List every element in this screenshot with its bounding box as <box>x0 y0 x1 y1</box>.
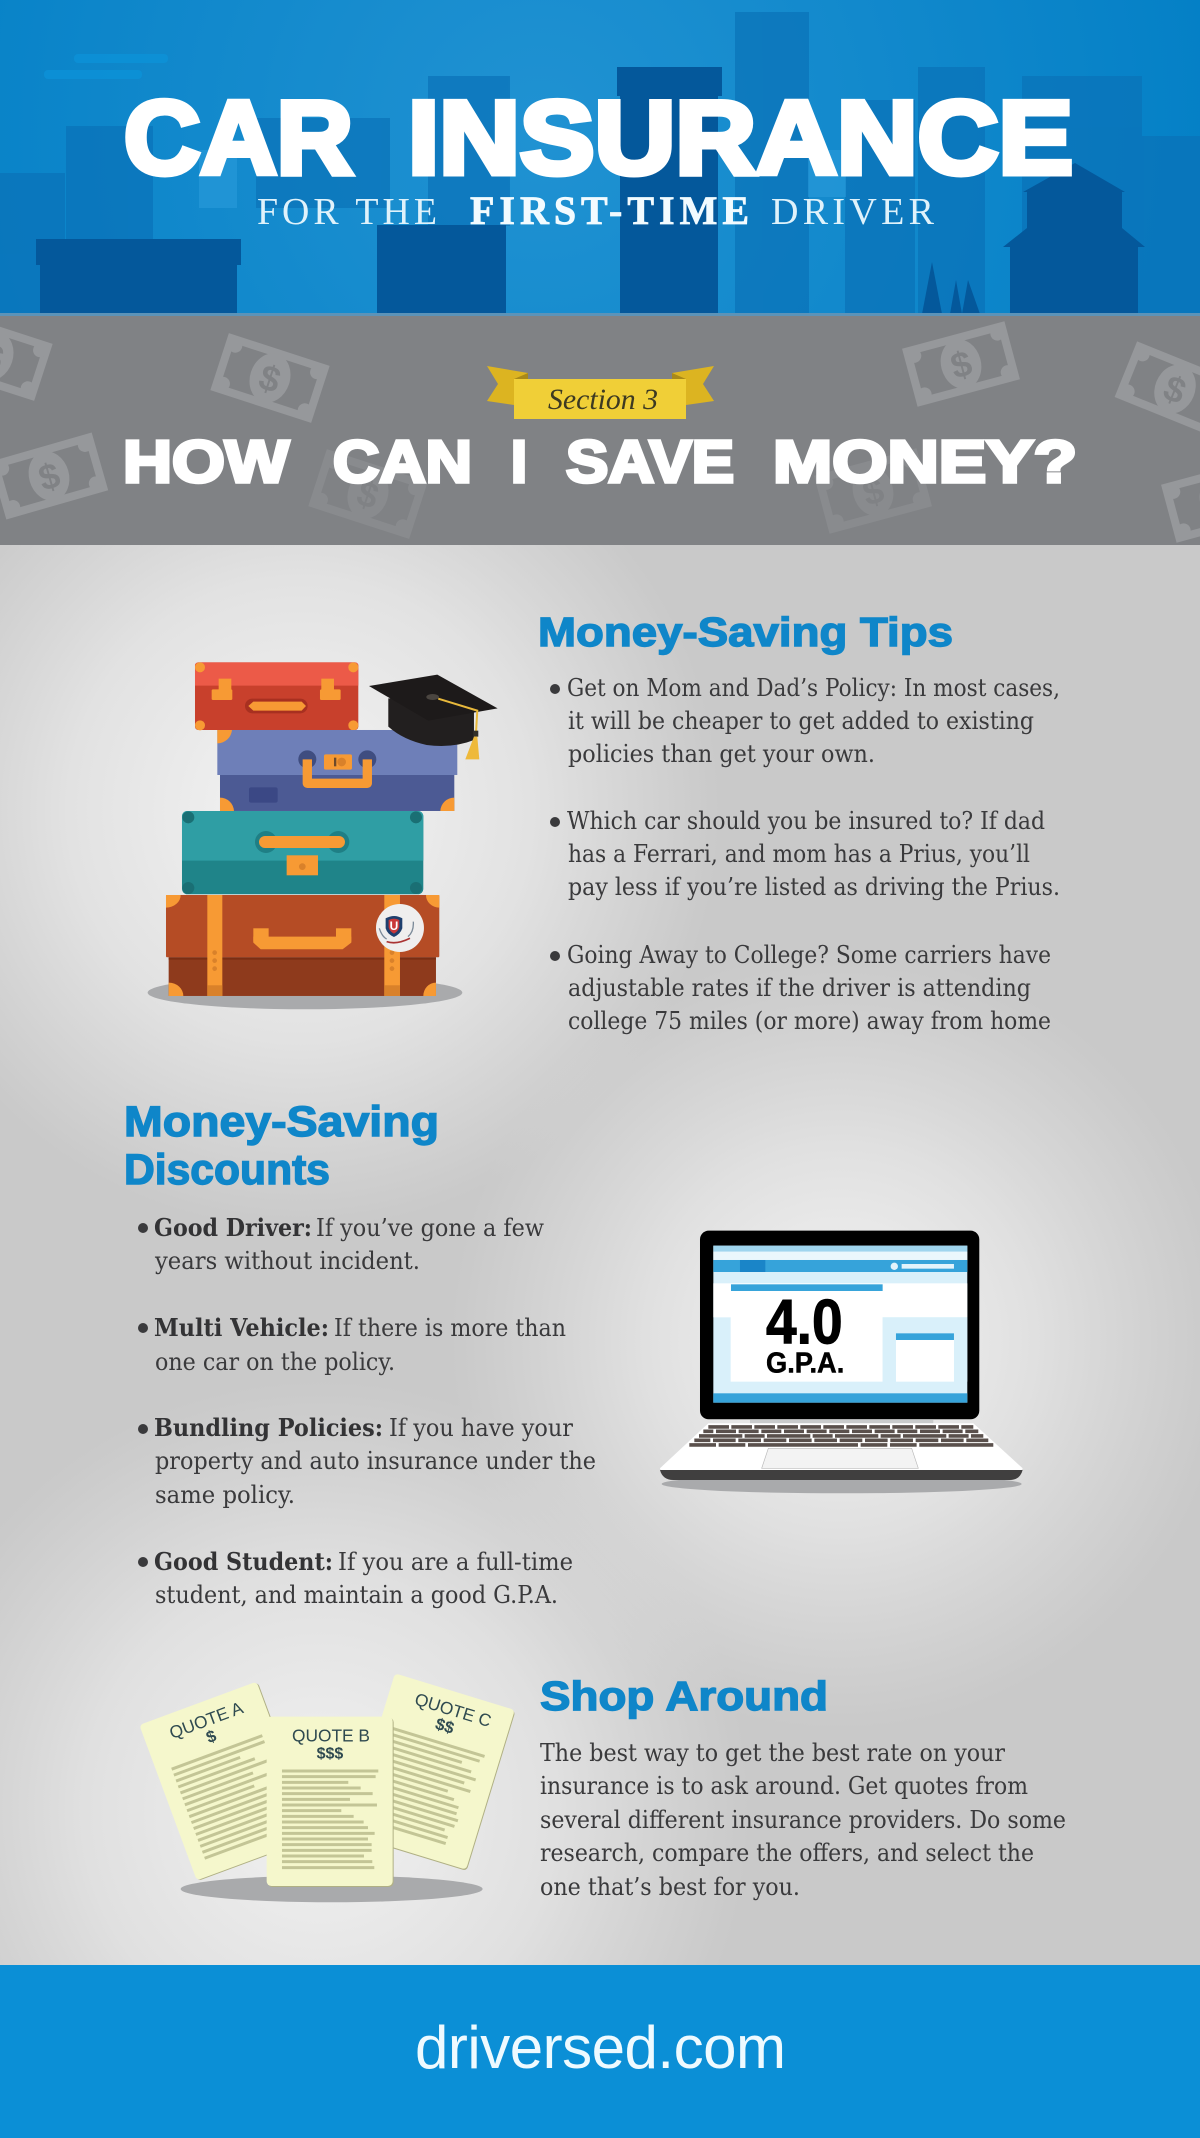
quote a document: QUOTE A <box>167 1697 246 1743</box>
quote b document: QUOTE B <box>292 1726 370 1746</box>
skyline background <box>0 12 1200 314</box>
tip: which car: has a Ferrari, and mom has a Prius, you’ll <box>568 840 1030 868</box>
tip: which car: pay less if you’re listed as driving the Prius. <box>568 873 1060 901</box>
section heading: HOW <box>123 429 289 495</box>
tip: parents' policy: it will be cheaper to get added to existing <box>568 707 1034 735</box>
quote a document <box>139 1681 315 1881</box>
money bills background: $ <box>1158 367 1192 412</box>
section heading: MONEY? <box>773 429 1077 495</box>
discount: good student <box>138 1547 573 1609</box>
illustration: stacked suitcases with graduation cap <box>148 662 498 1009</box>
money bills background: $ <box>858 469 888 514</box>
discount: bundling policies: property and auto insurance under the <box>155 1447 596 1475</box>
heading: money-saving discounts <box>124 1098 439 1194</box>
subtitle <box>257 188 935 233</box>
discount: bundling policies: same policy. <box>155 1481 295 1509</box>
quote c document <box>346 1673 516 1871</box>
section heading: CAN <box>333 429 472 495</box>
discount: good driver: If you’ve gone a few <box>316 1214 544 1242</box>
shop around paragraph <box>540 1739 1066 1901</box>
subtitle: FIRST-TIME <box>470 188 749 233</box>
quote b document: $$$ <box>317 1746 343 1763</box>
discount: good student: Good Student: <box>154 1547 333 1576</box>
shop around paragraph: The best way to get the best rate on your <box>540 1739 1005 1767</box>
graduation cap <box>369 675 498 759</box>
discount: good driver: Good Driver: <box>154 1213 312 1242</box>
money bills background <box>0 311 1200 543</box>
laptop screen <box>700 1231 979 1419</box>
tips list <box>550 674 1060 1035</box>
ribbon: section 3 <box>487 366 714 419</box>
laptop keyboard base <box>660 1419 1023 1480</box>
discount: bundling policies: If you have your <box>389 1414 573 1442</box>
discount: bundling policies <box>138 1413 596 1509</box>
tip: college: adjustable rates if the driver is attending <box>568 974 1031 1002</box>
illustration: laptop with 4.0 GPA <box>660 1231 1023 1493</box>
tip: parents' policy: policies than get your own. <box>568 740 875 768</box>
title: CAR <box>124 80 353 196</box>
quote c document: QUOTE C <box>412 1689 494 1731</box>
section banner panel <box>0 311 1200 545</box>
footer panel <box>0 1965 1200 2138</box>
shop around paragraph: one that’s best for you. <box>540 1873 800 1901</box>
discount: good driver <box>138 1213 544 1275</box>
discounts list <box>138 1213 596 1609</box>
discount: multi vehicle: If there is more than <box>334 1314 566 1342</box>
title: INSURANCE <box>408 80 1073 196</box>
discount: good student: student, and maintain a good G.P.A. <box>155 1581 558 1609</box>
tip: college: college 75 miles (or more) away from home <box>568 1007 1051 1035</box>
discount: multi vehicle <box>138 1313 566 1376</box>
header panel <box>0 0 1200 314</box>
money bills background: $ <box>946 342 976 387</box>
quote b document <box>267 1717 394 1887</box>
subtitle: FOR THE <box>257 191 441 233</box>
section heading: I <box>511 429 527 495</box>
laptop screen: G.P.A. <box>766 1347 844 1379</box>
illustration: three insurance quotes <box>139 1673 516 1902</box>
discount: bundling policies: Bundling Policies: <box>154 1413 383 1442</box>
money bills background: $ <box>352 472 384 517</box>
ribbon: section 3: Section 3 <box>548 383 658 416</box>
logo: driversed.com: driversed.com <box>415 2014 786 2081</box>
shop around paragraph: several different insurance providers. Do some <box>540 1806 1066 1834</box>
tip: college <box>550 941 1051 1035</box>
discount: multi vehicle: one car on the policy. <box>155 1348 395 1376</box>
tip: college: Going Away to College? Some carriers have <box>567 941 1051 969</box>
tip: parents' policy: Get on Mom and Dad’s Policy: In most cases, <box>567 674 1060 702</box>
money bills background: $ <box>254 356 286 401</box>
content background <box>0 545 1200 1965</box>
brown suitcase <box>166 895 439 996</box>
heading: money-saving discounts: Money-Saving <box>124 1098 439 1146</box>
sticker: U <box>390 919 398 933</box>
shop around paragraph: insurance is to ask around. Get quotes from <box>540 1772 1028 1800</box>
sticker <box>376 904 424 952</box>
quote c document: $$ <box>433 1714 457 1738</box>
title <box>124 80 1073 196</box>
heading: money-saving discounts: Discounts <box>124 1146 330 1194</box>
discount: good driver: years without incident. <box>154 1247 420 1275</box>
heading: money-saving tips: Money-Saving Tips <box>538 609 953 655</box>
money bills background: $ <box>34 454 64 499</box>
teal suitcase <box>182 811 423 894</box>
tip: parents' policy <box>550 674 1060 768</box>
tip: which car <box>550 807 1060 901</box>
shop around paragraph: research, compare the offers, and select the <box>540 1839 1034 1867</box>
discount: multi vehicle: Multi Vehicle: <box>154 1313 329 1342</box>
section heading: SAVE <box>566 429 734 495</box>
red suitcase <box>195 662 358 730</box>
tip: which car: Which car should you be insured to? If dad <box>567 807 1045 835</box>
discount: good student: If you are a full-time <box>338 1548 573 1576</box>
heading: shop around: Shop Around <box>540 1673 828 1719</box>
laptop screen: 4.0 <box>766 1287 843 1357</box>
section heading <box>123 429 1077 495</box>
blue suitcase <box>217 730 457 811</box>
quote a document: $ <box>204 1726 219 1747</box>
subtitle: DRIVER <box>771 191 935 233</box>
